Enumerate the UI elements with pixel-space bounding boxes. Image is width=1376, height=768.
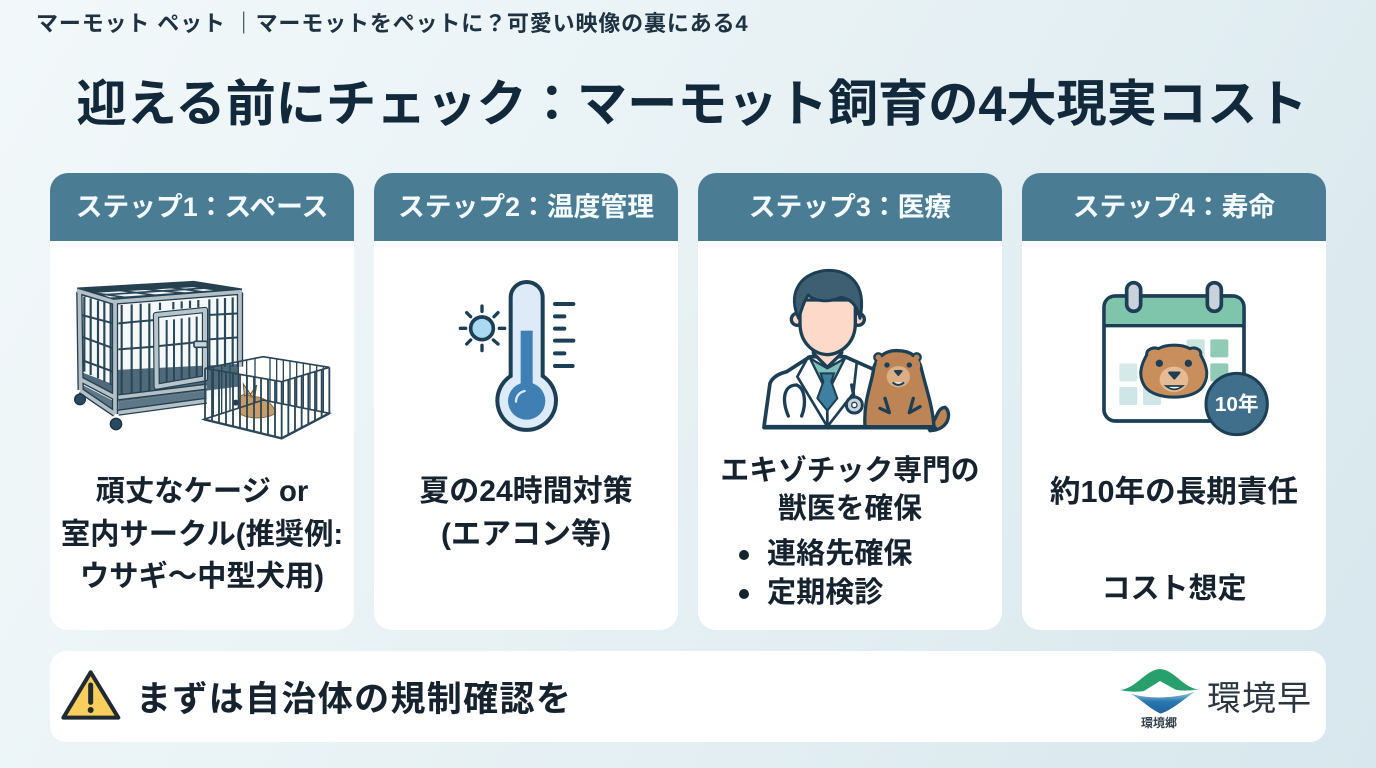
panel: step 2 temperature xyxy=(374,173,678,630)
logo mark xyxy=(1120,669,1198,714)
text: exotic vet: 獣医を確保 xyxy=(778,492,922,524)
text: check local regulations: まずは自治体の規制確認を xyxy=(136,680,572,719)
panel heading: step 4 xyxy=(1022,173,1326,241)
panel: step 3 medical xyxy=(698,173,1002,630)
icon: thermometer and sun xyxy=(458,280,576,432)
rabbit xyxy=(233,384,276,418)
text: summer measures xyxy=(419,475,633,550)
panel heading: step 4: ステップ4：寿命 xyxy=(1073,192,1275,222)
panel heading: step 2: ステップ2：温度管理 xyxy=(398,192,654,222)
text: long-term responsibility: 約10年の長期責任 xyxy=(1050,475,1298,509)
text: cage recommendation: 頑丈なケージ or xyxy=(96,475,308,508)
logo: environment agency xyxy=(1120,669,1312,730)
list: contact and checkups xyxy=(739,538,912,609)
panel: step 4 lifespan xyxy=(1022,173,1326,630)
panel: bottom notice bar xyxy=(50,651,1326,742)
panel: step 1 space xyxy=(50,173,354,630)
text: cage recommendation: 室内サークル(推奨例: xyxy=(61,518,343,550)
badge: 10 years xyxy=(1206,373,1267,435)
text: exotic vet: エキゾチック専門の xyxy=(720,455,980,487)
text: cage recommendation: ウサギ～中型犬用) xyxy=(80,560,324,593)
panel heading: step 2 xyxy=(374,173,678,241)
icon: warning triangle xyxy=(61,670,120,720)
title: 迎える前にチェック：マーモット飼育の4大現実コスト xyxy=(77,76,1307,132)
text: cost estimate: コスト想定 xyxy=(1101,573,1246,605)
icon: vet with marmot xyxy=(762,268,950,432)
badge: 10 years: 10年 xyxy=(1215,393,1258,416)
list item: contact: 連絡先確保 xyxy=(767,538,912,570)
logo wordmark: 環境早 xyxy=(1207,680,1312,718)
list item: checkups: 定期検診 xyxy=(767,577,883,609)
panel heading: step 1 xyxy=(50,173,354,241)
text: summer measures: (エアコン等) xyxy=(441,518,611,550)
text: cage recommendation xyxy=(61,475,343,593)
icon: calendar with marmot and 10-year badge xyxy=(1102,280,1269,436)
logo small caption: 環境郷 xyxy=(1141,716,1177,730)
text: exotic vet xyxy=(720,455,980,524)
panel heading: step 3: ステップ3：医療 xyxy=(749,192,951,222)
panel heading: step 1: ステップ1：スペース xyxy=(76,192,328,222)
breadcrumb heading: マーモット ペット ｜マーモットをペットに？可愛い映像の裏にある4 xyxy=(36,11,749,36)
icon: cage and playpen xyxy=(74,280,332,440)
text: summer measures: 夏の24時間対策 xyxy=(419,475,633,508)
panel heading: step 3 xyxy=(698,173,1002,241)
